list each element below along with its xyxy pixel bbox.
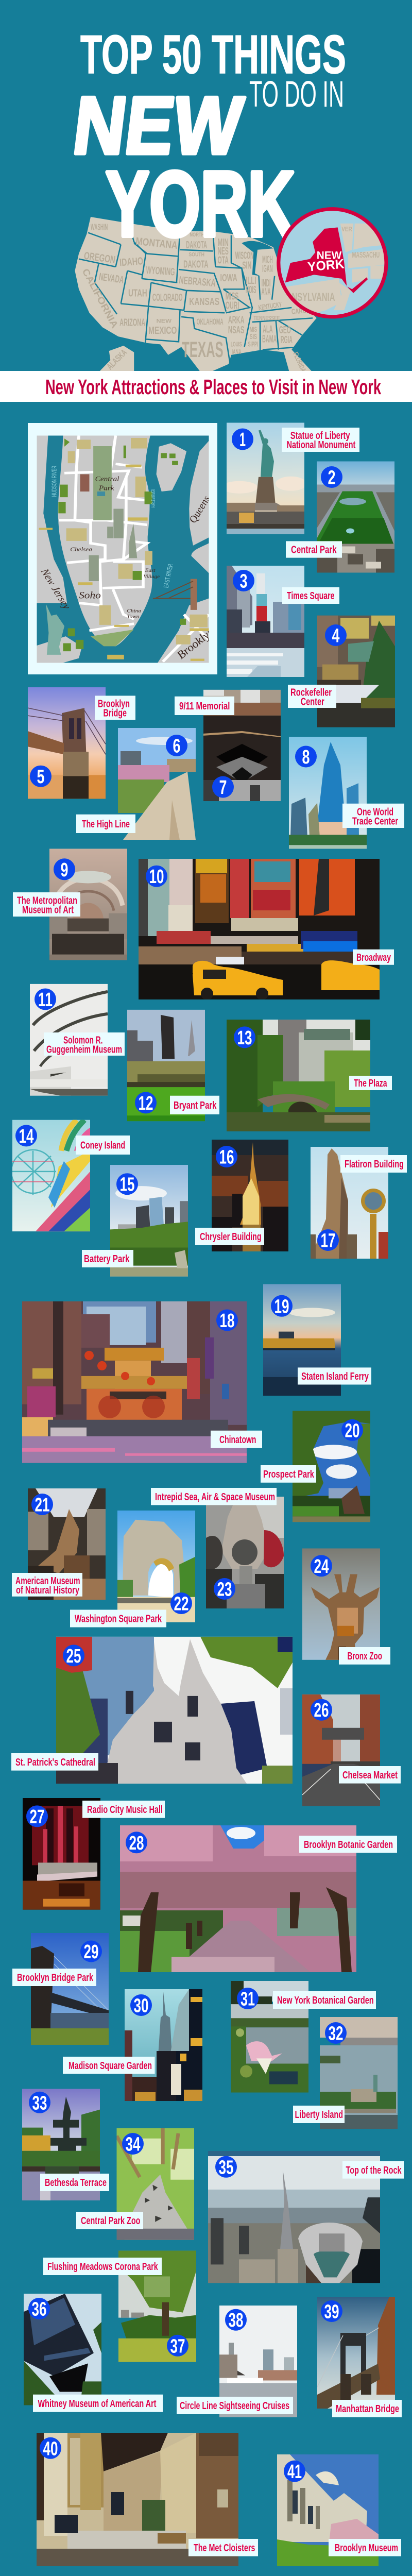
label: Bronx Zoo: Bronx Zoo xyxy=(347,1651,382,1662)
state names: UTAH xyxy=(128,288,147,299)
label: Statue of Liberty xyxy=(282,428,359,452)
state names: RGIA xyxy=(281,334,293,346)
photo 12: Bryant Park xyxy=(127,1010,205,1121)
state names: OURI xyxy=(226,300,239,312)
label: Washington Square Park xyxy=(70,1609,166,1627)
label: Coney Island: Coney Island xyxy=(80,1140,125,1151)
label: One World Trade Center xyxy=(342,804,404,828)
state names: COLORADO xyxy=(152,292,183,303)
label: Flushing Meadows Corona Park: Flushing Meadows Corona Park xyxy=(47,2261,158,2273)
US state map illustration xyxy=(75,217,317,374)
photo 24: Bronx Zoo giraffe xyxy=(302,1549,380,1660)
badge 16: 16 xyxy=(219,1147,234,1168)
label: Whitney Museum of American Art: Whitney Museum of American Art xyxy=(38,2398,157,2410)
label: Broadway xyxy=(353,950,394,965)
badge 34: 34 xyxy=(126,2134,140,2156)
badge 31: 31 xyxy=(241,1989,255,2010)
badge 6 xyxy=(166,735,187,757)
label: Flushing Meadows Corona Park xyxy=(43,2258,162,2275)
label: Broadway: Broadway xyxy=(356,952,391,963)
state names: SIPPI xyxy=(248,340,258,348)
label: Solomon R. Guggenheim Museum: Solomon R. xyxy=(63,1035,103,1046)
badge 29: 29 xyxy=(83,1941,99,1963)
panel: Manhattan illustrated map: Central xyxy=(95,476,119,483)
photo 35: Top of the Rock xyxy=(208,2151,380,2283)
badge 41 xyxy=(284,2461,305,2483)
state names: NEBRASKA xyxy=(179,275,216,289)
panel: Manhattan illustrated map: Chelsea xyxy=(70,546,92,553)
badge 22: 22 xyxy=(174,1593,188,1615)
photo 33: Bethesda Terrace xyxy=(22,2089,100,2200)
photo 5: Brooklyn Bridge xyxy=(28,687,106,799)
label: Brooklyn Bridge: Bridge xyxy=(103,708,127,719)
panel: Manhattan illustrated map: Brooklyn xyxy=(174,625,217,661)
label: Rockefeller Center: Rockefeller xyxy=(290,687,332,699)
photo 37: Flushing Meadows Corona Park xyxy=(118,2250,196,2362)
state names: SIN xyxy=(242,260,251,271)
state names: IGAN xyxy=(262,263,273,275)
label: The High Line: The High Line xyxy=(82,819,130,830)
badge 36: 36 xyxy=(32,2299,46,2320)
label: Solomon R. Guggenheim Museum xyxy=(44,1032,125,1056)
badge 11: 11 xyxy=(38,989,53,1011)
label: Chrysler Building: Chrysler Building xyxy=(200,1231,262,1243)
badge 2 xyxy=(321,466,342,488)
label: The Plaza: The Plaza xyxy=(354,1078,387,1089)
state names: ARKA xyxy=(228,315,245,326)
state names: LOUIS xyxy=(231,340,242,348)
state names: NSAS xyxy=(228,325,244,336)
label: Top of the Rock xyxy=(342,2161,404,2179)
state names: MIS xyxy=(250,326,257,334)
badge 6: 6 xyxy=(173,736,180,757)
state names: ALASKA xyxy=(105,347,129,371)
label: Prospect Park: Prospect Park xyxy=(263,1469,315,1480)
badge 18: 18 xyxy=(219,1310,235,1332)
label: Intrepid Sea, Air & Space Museum: Intrepid Sea, Air & Space Museum xyxy=(155,1492,275,1503)
state names: SOUTH xyxy=(188,251,204,258)
badge 30: 30 xyxy=(134,1995,148,2016)
photo 11: Guggenheim xyxy=(30,984,108,1096)
label: Circle Line Sightseeing Cruises xyxy=(177,2397,293,2414)
badge 15: 15 xyxy=(119,1174,135,1196)
badge 32: 32 xyxy=(329,2023,343,2044)
title xyxy=(68,24,346,256)
photo 1: Statue of Liberty xyxy=(227,422,304,534)
photo 32: Liberty Island xyxy=(320,2017,398,2129)
state names: IOWA xyxy=(220,273,237,284)
label: Chelsea Market xyxy=(339,1766,401,1784)
subtitle banner xyxy=(0,371,412,402)
label: Central Park: Central Park xyxy=(291,544,337,555)
photo 2: Central Park xyxy=(317,462,394,573)
badge 12: 12 xyxy=(138,1093,153,1114)
state names: TENNESSEE xyxy=(253,314,280,321)
label: Staten Island Ferry: Staten Island Ferry xyxy=(301,1371,369,1382)
badge 24: 24 xyxy=(314,1556,329,1578)
label: American Museum of Natural History xyxy=(12,1573,82,1597)
label: The High Line xyxy=(76,815,135,833)
state names xyxy=(80,222,310,374)
label: Bethesda Terrace: Bethesda Terrace xyxy=(45,2177,107,2189)
photo 38: Circle Line Sightseeing Cruises xyxy=(219,2306,297,2417)
state names: NEW xyxy=(157,318,172,325)
label: Madison Square Garden: Madison Square Garden xyxy=(68,2060,152,2072)
badge 4 xyxy=(325,624,347,647)
panel: Manhattan illustrated map: EAST RIVER xyxy=(162,563,175,588)
state names: TEXAS xyxy=(182,337,224,362)
label: Chinatown: Chinatown xyxy=(219,1434,256,1446)
photo 41: Brooklyn Museum xyxy=(277,2454,379,2566)
label: Washington Square Park: Washington Square Park xyxy=(75,1614,162,1625)
badge 35: 35 xyxy=(218,2157,234,2178)
label: Brooklyn Botanic Garden xyxy=(299,1836,397,1853)
panel: Manhattan illustrated map: New Jersey xyxy=(38,567,73,611)
photo 20: Prospect Park xyxy=(293,1411,370,1522)
label: American Museum of Natural History: American Museum xyxy=(15,1575,80,1587)
label: Times Square xyxy=(282,587,339,604)
panel: Manhattan illustrated map xyxy=(28,423,217,674)
badge 8 xyxy=(295,746,317,768)
badge 28: 28 xyxy=(129,1833,144,1854)
New York state badge: NSYLVANIA xyxy=(291,291,335,303)
label: Whitney Museum of American Art xyxy=(33,2395,163,2412)
badge 5: 5 xyxy=(37,766,44,788)
label: Bronx Zoo xyxy=(339,1647,390,1665)
state names: WYOMING xyxy=(146,265,175,278)
state names: NEVADA xyxy=(98,272,125,286)
badge 2: 2 xyxy=(328,467,336,488)
badge 19: 19 xyxy=(274,1296,289,1317)
New York state badge: NEW xyxy=(317,249,342,262)
brush word: york: YORK xyxy=(106,152,295,256)
photo 25: St. Patrick's Cathedral xyxy=(56,1636,293,1784)
label: 9/11 Memorial: 9/11 Memorial xyxy=(179,701,230,712)
panel: Manhattan illustrated map: East xyxy=(145,568,156,573)
label: Central Park Zoo: Central Park Zoo xyxy=(81,2215,140,2227)
label: Manhattan Bridge xyxy=(332,2400,402,2417)
photo 10: Broadway xyxy=(139,859,380,999)
label: Chrysler Building xyxy=(195,1228,264,1245)
label: American Museum of Natural History: of Natural History xyxy=(16,1585,80,1596)
label: New York Botanical Garden: New York Botanical Garden xyxy=(277,1995,374,2006)
state names: ALA xyxy=(263,324,273,335)
panel: Manhattan illustrated map: China xyxy=(127,608,141,614)
panel: Manhattan illustrated map: Soho xyxy=(79,590,101,601)
label: New York Botanical Garden xyxy=(273,1991,376,2009)
badge 3 xyxy=(233,570,254,592)
state names: SIS xyxy=(250,333,257,341)
badge 21: 21 xyxy=(35,1494,49,1516)
state names: NOIS xyxy=(246,284,256,296)
photo 40: The Met Cloisters xyxy=(37,2433,238,2566)
state names: DAKOTA xyxy=(186,240,207,251)
photo 4: Rockefeller Center xyxy=(317,615,395,727)
label: Rockefeller Center xyxy=(288,685,336,708)
badge 31 xyxy=(237,1988,259,2010)
label: Solomon R. Guggenheim Museum: Guggenheim Museum xyxy=(46,1044,122,1055)
title line: to do in: TO DO IN xyxy=(249,74,344,115)
state names: ARIZONA xyxy=(119,317,145,329)
photo 31: New York Botanical Garden xyxy=(231,1981,308,2093)
state names: MIN xyxy=(217,237,229,248)
photo 7: 9/11 Memorial xyxy=(203,689,281,801)
label: Madison Square Garden xyxy=(63,2057,154,2074)
photo 39: Manhattan Bridge xyxy=(317,2297,395,2409)
photo 27: Radio City Music Hall xyxy=(23,1798,100,1910)
badge 17: 17 xyxy=(320,1230,336,1252)
photo 8: One World Trade Center xyxy=(289,737,367,849)
photo 9: The Metropolitan Museum of Art xyxy=(49,849,127,960)
photo 21: American Museum of Natural History xyxy=(28,1488,106,1600)
badge 5 xyxy=(30,766,52,788)
label: One World Trade Center: One World xyxy=(357,807,393,818)
photo 26: Chelsea Market xyxy=(302,1694,380,1806)
photo 23: Intrepid xyxy=(206,1497,284,1608)
brush word: new: NEW xyxy=(68,80,247,171)
label: Brooklyn Bridge Park: Brooklyn Bridge Park xyxy=(17,1972,94,1984)
photo 22: Washington Square Park xyxy=(117,1511,195,1622)
photo 34: Central Park Zoo xyxy=(116,2128,194,2240)
panel: Manhattan illustrated map: Queens xyxy=(187,494,213,525)
badge 27: 27 xyxy=(30,1806,44,1828)
label: Central Park xyxy=(286,541,342,558)
label: The Plaza xyxy=(349,1076,392,1090)
badge 41: 41 xyxy=(287,2461,302,2483)
panel: Manhattan illustrated map: HUDSON RIVER xyxy=(50,466,58,497)
panel: Manhattan illustrated map: HARLEM RIVER xyxy=(150,489,157,507)
state names: KENTUCKY xyxy=(258,301,283,312)
badge 25: 25 xyxy=(66,1646,81,1667)
badge 38: 38 xyxy=(229,2310,243,2331)
label: The Metropolitan Museum of Art: Museum of Art xyxy=(22,905,74,916)
state names: IANA xyxy=(232,348,242,355)
state names: INDI xyxy=(262,278,271,289)
label: Brooklyn Bridge Park xyxy=(12,1969,96,1986)
label: Central Park Zoo xyxy=(76,2212,143,2229)
badge 40: 40 xyxy=(43,2438,58,2460)
label: 9/11 Memorial xyxy=(175,697,234,715)
badge 26: 26 xyxy=(314,1700,329,1721)
badge 39: 39 xyxy=(324,2301,339,2323)
badge 10: 10 xyxy=(149,866,164,888)
label: Intrepid Sea, Air & Space Museum xyxy=(151,1488,277,1505)
label: Statue of Liberty: Statue of Liberty xyxy=(290,430,350,442)
label: Liberty Island xyxy=(293,2106,345,2123)
state names: BAMA xyxy=(262,333,277,345)
label: St. Patrick's Cathedral xyxy=(11,1753,98,1771)
state names: ANA xyxy=(262,286,271,298)
photo 30: Madison Square Garden xyxy=(125,1989,202,2101)
badge 7: 7 xyxy=(219,777,227,799)
state names: OREGON xyxy=(83,250,116,266)
label: St. Patrick's Cathedral: St. Patrick's Cathedral xyxy=(15,1757,95,1768)
label: Statue of Liberty: National Monument xyxy=(287,439,356,451)
state names: MISS xyxy=(226,291,238,302)
label: Staten Island Ferry xyxy=(298,1367,371,1385)
label: Battery Park: Battery Park xyxy=(84,1253,130,1265)
photo 29: Brooklyn Bridge Park xyxy=(31,1933,109,2045)
label: Battery Park xyxy=(82,1250,133,1267)
label: Rockefeller Center: Center xyxy=(301,697,324,708)
state names: DAKOTA xyxy=(183,259,209,270)
photo 17: Flatiron Building xyxy=(311,1147,388,1259)
label: Brooklyn Museum xyxy=(329,2539,401,2556)
badge 33: 33 xyxy=(32,2092,47,2114)
badge 37: 37 xyxy=(170,2335,185,2357)
photo 16: Chrysler Building xyxy=(212,1140,288,1251)
state names: CALIFORNIA xyxy=(80,267,121,330)
panel: Manhattan illustrated map: Park xyxy=(98,485,114,492)
state names: KANSAS xyxy=(189,296,219,308)
label: The Met Cloisters: The Met Cloisters xyxy=(194,2543,255,2554)
state names: WISCON xyxy=(235,250,253,262)
panel: Manhattan illustrated map: Town xyxy=(127,614,139,619)
state names: GEO xyxy=(279,325,291,336)
label: Circle Line Sightseeing Cruises: Circle Line Sightseeing Cruises xyxy=(180,2400,289,2412)
state names: ILLI xyxy=(246,275,256,286)
photo 28: Brooklyn Botanic Garden xyxy=(120,1825,356,1972)
badge 20: 20 xyxy=(345,1420,359,1442)
state names: OKLAHOMA xyxy=(197,317,224,327)
label: Chinatown xyxy=(211,1431,262,1448)
label: The Metropolitan Museum of Art xyxy=(13,892,80,917)
label: Prospect Park xyxy=(261,1465,316,1483)
photo 6: The High Line xyxy=(118,728,196,840)
badge 14: 14 xyxy=(19,1126,34,1147)
label: Radio City Music Hall: Radio City Music Hall xyxy=(87,1804,163,1816)
badge 9 xyxy=(54,858,75,881)
state names: IDAHO xyxy=(119,256,144,268)
photo 18: Chinatown xyxy=(22,1301,247,1463)
label: The Metropolitan Museum of Art: The Metropolitan xyxy=(17,895,77,907)
label: Flatiron Building xyxy=(340,1155,407,1173)
badge 13: 13 xyxy=(237,1027,252,1049)
label: Radio City Music Hall xyxy=(82,1801,165,1818)
label: Bryant Park: Bryant Park xyxy=(174,1100,217,1111)
label: Coney Island xyxy=(76,1136,130,1155)
badge 23: 23 xyxy=(217,1579,232,1600)
photo 15: Battery Park xyxy=(110,1165,188,1277)
label: Times Square: Times Square xyxy=(287,590,335,602)
state names: WASHIN xyxy=(91,222,108,232)
badge 1: 1 xyxy=(239,429,246,451)
badge 9: 9 xyxy=(61,859,68,881)
label: Liberty Island: Liberty Island xyxy=(295,2109,343,2121)
state names: NORTH xyxy=(190,232,204,238)
photo 14: Coney Island xyxy=(12,1120,90,1231)
label: The Met Cloisters xyxy=(188,2539,258,2556)
badge 7 xyxy=(212,776,234,799)
badge 4: 4 xyxy=(332,625,340,647)
state names: OTA xyxy=(217,255,229,266)
badge 3: 3 xyxy=(240,571,247,592)
photo 13: The Plaza xyxy=(227,1020,370,1131)
label: Brooklyn Bridge xyxy=(95,696,135,720)
New York state badge: VER xyxy=(341,225,352,233)
photo 19: Staten Island Ferry xyxy=(263,1284,341,1396)
label: Bryant Park xyxy=(170,1096,219,1114)
state names: MEXICO xyxy=(148,325,177,336)
badge 8: 8 xyxy=(302,747,310,768)
label: Bethesda Terrace xyxy=(40,2174,109,2191)
panel: Manhattan illustrated map: Village xyxy=(144,574,160,580)
label: Brooklyn Bridge: Brooklyn xyxy=(98,699,130,710)
photo 3: Times Square xyxy=(227,566,304,677)
state names: MICH xyxy=(262,254,273,265)
photo 36: Whitney Museum xyxy=(24,2294,101,2405)
badge 1 xyxy=(232,429,253,451)
New York state badge xyxy=(277,207,388,318)
state names: NES xyxy=(217,246,229,257)
New York state badge: YORK xyxy=(307,257,345,275)
state names: MONTANA xyxy=(135,236,178,251)
